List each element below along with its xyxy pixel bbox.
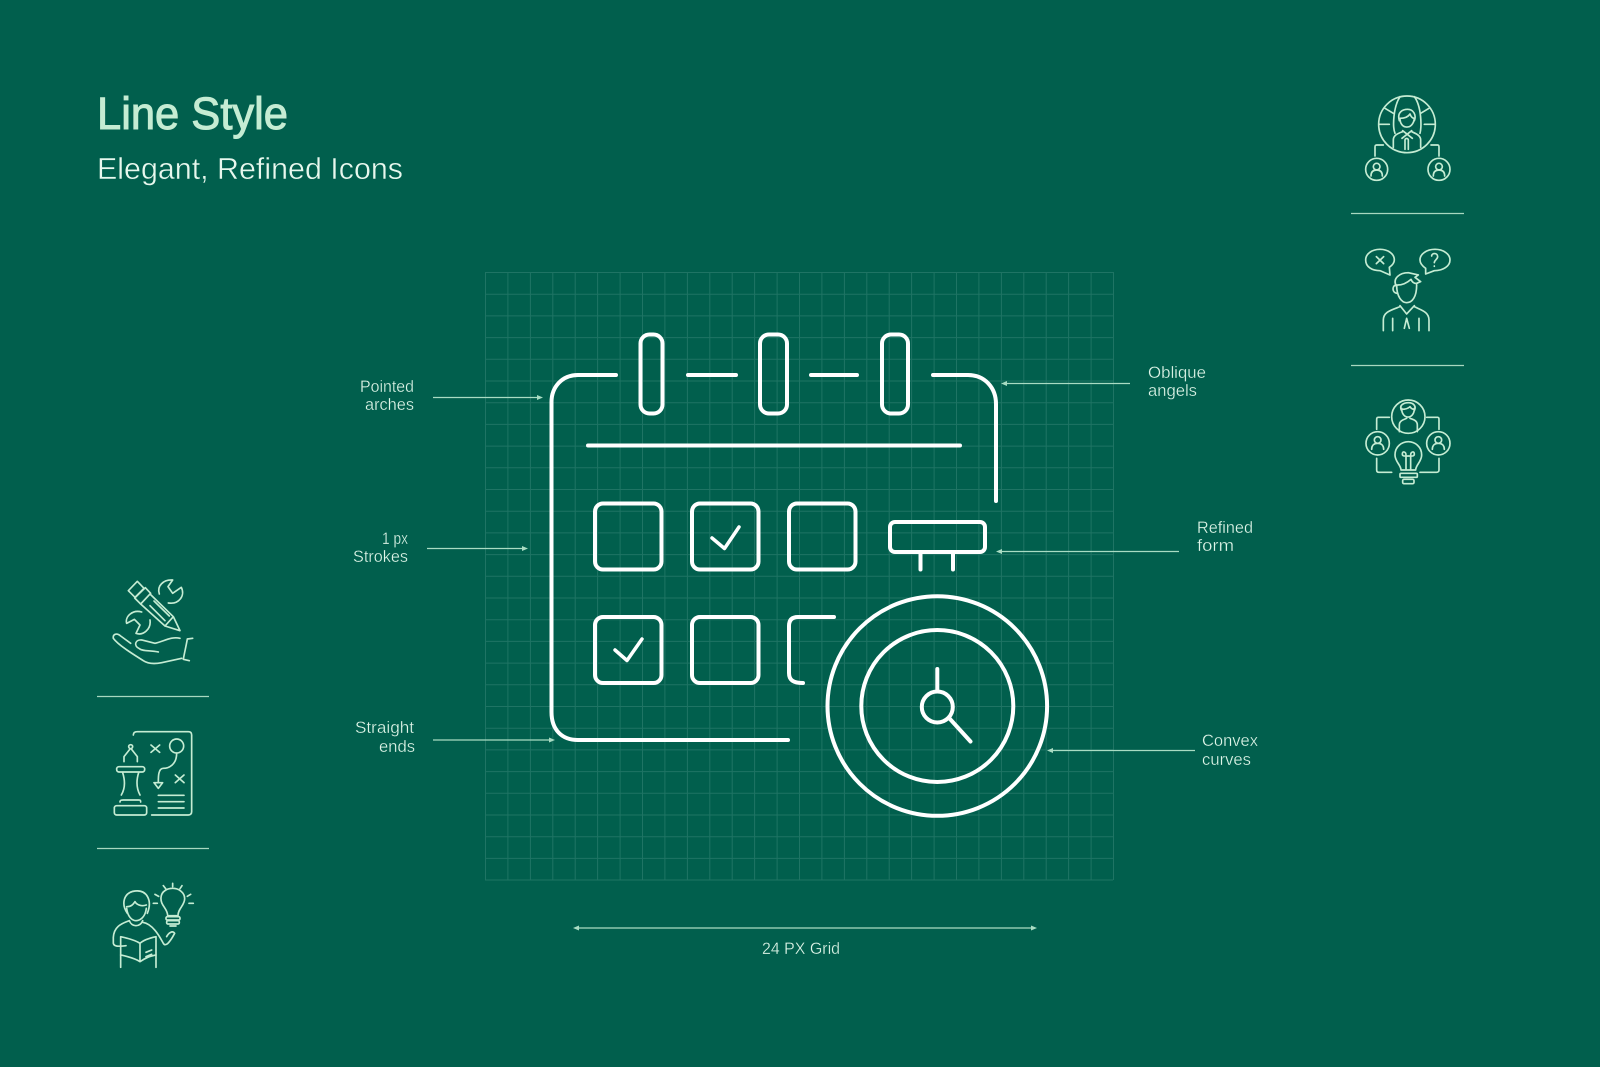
callout: straight ends: ends [379,737,415,756]
binder ring 2 [760,334,787,414]
icon: calendar with clock [552,334,1047,816]
title: Line Style [97,88,288,139]
top segments [688,373,857,377]
date box row 2 col 1 [595,617,662,683]
calendar top right corner [933,375,996,501]
clock inner ring [861,630,1013,782]
divider [1351,364,1464,366]
callout: pointed arches: arches [365,395,414,414]
icon: tools in hand [113,580,193,663]
grid dimension label: 24 PX Grid [762,939,840,958]
icon: team and idea [1366,400,1450,484]
callout: oblique angels: Oblique [1148,363,1206,382]
callout: convex curves [1047,731,1258,769]
icon: reader with light bulb [113,883,193,967]
callout: straight ends: Straight [355,718,414,737]
clock hands [937,669,970,742]
callout: convex curves: curves [1202,750,1251,769]
cut off date box row 2 col 3 [789,617,834,683]
callout: refined form: Refined [1197,518,1253,537]
check mark row 1 [712,527,739,548]
callout: pointed arches [360,377,543,414]
date box row 1 col 2 [692,504,758,570]
icon: chess strategy [114,732,192,815]
clock hub [922,692,953,722]
grid dimension arrow [573,926,1037,930]
divider [1351,212,1464,214]
calendar outer frame [552,375,788,740]
date box row 1 col 3 [789,504,856,570]
date box row 1 col 1 [595,504,662,570]
binder ring 3 [882,334,908,414]
callout: oblique angels: angels [1148,381,1197,400]
callout: convex curves: Convex [1202,731,1258,750]
callout: refined form [996,518,1253,555]
callout: straight ends [355,718,555,756]
binder ring 1 [640,334,662,414]
callout: 1 px strokes: 1 px [382,529,408,548]
subtitle: Elegant, Refined Icons [97,151,403,186]
callout: 1 px strokes: Strokes [353,547,408,566]
partial date box with legs [890,522,985,570]
callout: pointed arches: Pointed [360,377,414,396]
header divider [588,444,960,448]
callout: 1 px strokes [353,529,528,566]
clock outer ring [828,596,1047,816]
24 px background grid [485,272,1114,880]
check mark row 2 [615,639,642,660]
divider [97,848,209,850]
icon: global leader with connections [1366,96,1450,180]
date box row 2 col 2 [692,617,758,683]
divider [97,696,209,698]
callout: refined form: form [1197,536,1234,555]
icon: person with speech bubbles [1366,249,1450,331]
callout: oblique angels [1001,363,1206,400]
